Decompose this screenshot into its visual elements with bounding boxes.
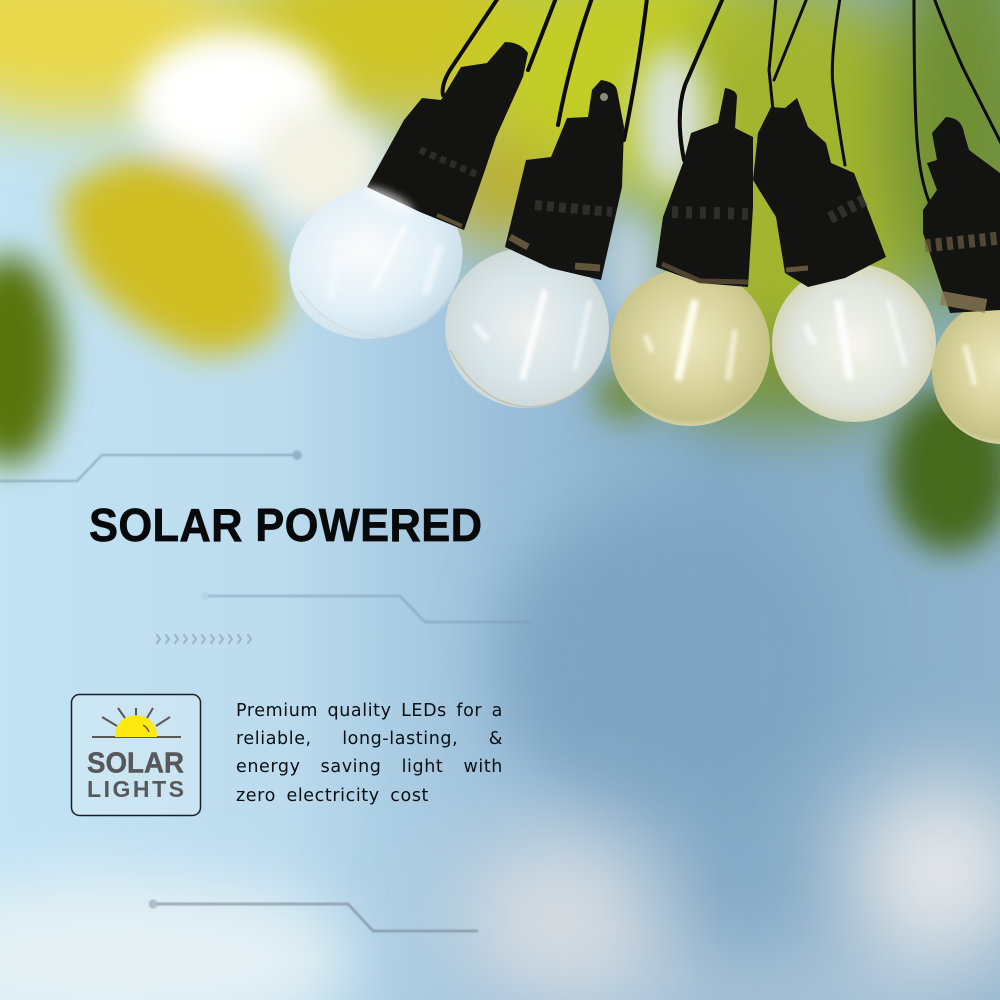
bulb 2 [445,248,609,408]
bulb 4 [772,264,936,422]
description text: zero electricity cost [236,786,429,806]
bulb 3 [610,268,770,426]
icon: yellow sun [115,715,157,737]
badge label: LIGHTS: LIGHTS [87,776,184,802]
circuit line: bottom [148,900,478,931]
socket 2 [505,80,624,280]
icon: solar lights badge [72,694,200,816]
circuit line: upper left [0,452,300,481]
socket 4 [753,98,886,287]
description text: Premium quality LEDs for a [236,701,503,721]
icon: sun rays and horizon [92,708,181,737]
circuit line: middle [201,592,530,622]
badge label: SOLAR: SOLAR [87,748,184,780]
description text: energy saving light with [236,757,503,777]
string light wires [443,0,1000,204]
socket 1 [367,42,528,230]
title: SOLAR POWERED [89,500,482,551]
chevron row [157,635,251,643]
bulb 5 [932,300,1000,444]
description text: reliable, long-lasting, & [236,729,503,749]
socket 3 [656,88,753,287]
socket 5 [923,117,1000,313]
bulb 1 [268,161,484,363]
bulb 1 glow over socket base [359,181,417,219]
